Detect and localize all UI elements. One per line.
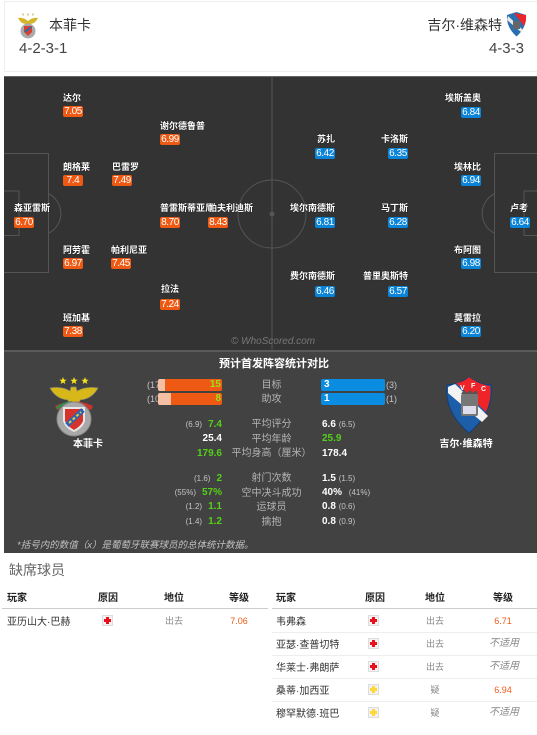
player: 巴雷罗 — [112, 162, 139, 186]
text: status out: 出去 — [165, 616, 183, 626]
player: 朗格莱: 朗格莱 — [63, 162, 90, 172]
player: 莫雷拉 — [454, 312, 481, 337]
panel: pitch with lineups — [4, 76, 537, 350]
icon: Gil Vicente crest large: V — [460, 385, 465, 392]
player: 班加基: 7.38 — [64, 326, 82, 337]
text: status out: 出去 — [426, 662, 444, 672]
player: 帕利尼亚: 7.45 — [112, 258, 130, 269]
player: 普雷斯蒂亚尼 — [160, 202, 214, 228]
chart: assists bar away: 1 — [324, 393, 330, 404]
player: 布阿图: 布阿图 — [454, 245, 481, 255]
player: 埃尔南德斯: 埃尔南德斯 — [290, 203, 335, 213]
player: 阿劳霍: 阿劳霍 — [63, 245, 90, 255]
heading: home team name: 本菲卡 — [49, 17, 91, 33]
player: 埃斯盖奥: 6.84 — [462, 107, 480, 118]
text: away assists league average: (1) — [386, 394, 397, 404]
icon: Gil Vicente crest large: C — [481, 386, 486, 393]
player: 普里奥斯特: 6.57 — [389, 286, 407, 297]
icon: Gil Vicente crest large — [446, 376, 492, 434]
text: rating: 7.06 — [230, 616, 248, 626]
stat: away dribbles: 0.8 (0.6) — [322, 501, 355, 512]
player: 谢尔德鲁普 — [160, 120, 205, 145]
text: label height: 平均身高（厘米） — [232, 448, 312, 459]
chart: assists bar home — [158, 393, 222, 405]
text: Benfica label: 本菲卡 — [73, 439, 103, 450]
stat: away rating: 6.6 (6.5) — [322, 419, 355, 430]
player: 莫雷拉: 6.20 — [462, 326, 480, 337]
chart: assists bar away — [321, 393, 385, 405]
icon: injury cross — [368, 638, 379, 649]
player: 马丁斯 — [381, 202, 408, 228]
player: 帕利尼亚 — [111, 245, 147, 269]
player: 帕利尼亚: 帕利尼亚 — [111, 245, 147, 255]
player: 埃林比: 埃林比 — [454, 162, 481, 172]
text: label age: 平均年龄 — [252, 434, 292, 445]
text: label tackles: 擒抱 — [262, 517, 282, 528]
player: 森亚雷斯: 森亚雷斯 — [14, 203, 50, 213]
player: 埃林比: 6.94 — [462, 175, 480, 186]
player: 朗格莱 — [63, 162, 90, 186]
icon: Gil Vicente crest small — [506, 12, 526, 36]
text: home formation: 4-2-3-1 — [19, 40, 67, 57]
player: 朗格莱: 7.4 — [67, 175, 79, 186]
stat: home aerial: (55%) 57% — [175, 487, 222, 498]
player: 费尔南德斯 — [290, 270, 335, 297]
player: 普雷斯蒂亚尼: 8.70 — [161, 217, 179, 228]
text: away goals league average: (3) — [386, 380, 397, 390]
player: 卡洛斯 — [381, 134, 408, 159]
player: 达尔 — [63, 92, 83, 117]
player: 班加基 — [63, 312, 90, 337]
text: Gil Vicente label: 吉尔·维森特 — [439, 439, 493, 450]
text: rating n/a: 不适用 — [489, 638, 519, 649]
stat: away tackles: 0.8 (0.9) — [322, 516, 355, 527]
text: label shots: 射门次数 — [252, 473, 292, 484]
icon: doubtful cross — [368, 707, 379, 718]
player: 卡洛斯: 6.35 — [389, 148, 407, 159]
player: 苏扎: 6.42 — [316, 148, 334, 159]
text: header player: 玩家 — [276, 593, 296, 604]
player: 卢考: 6.64 — [511, 217, 529, 228]
text: label aerial: 空中决斗成功 — [242, 488, 302, 499]
player: 阿劳霍 — [63, 245, 90, 269]
player: 普里奥斯特 — [363, 270, 408, 297]
icon: Benfica crest large — [50, 377, 98, 436]
player: 达尔: 7.05 — [64, 106, 82, 117]
stat: home dribbles: (1.2) 1.1 — [186, 501, 222, 512]
text: header status: 地位 — [164, 593, 184, 604]
player: 马丁斯: 6.28 — [389, 217, 407, 228]
row: 亚瑟·查普切特: 亚瑟·查普切特 — [276, 640, 339, 651]
table: away missing players — [272, 592, 537, 720]
player: 达尔: 达尔 — [63, 93, 81, 103]
row: 韦弗森: 韦弗森 — [276, 617, 306, 628]
player: 班加基: 班加基 — [63, 313, 90, 323]
panel: starting lineup stats comparison — [4, 350, 537, 553]
text: watermark: © WhoScored.com — [231, 336, 315, 347]
stat: away aerial: 40% (41%) — [322, 487, 370, 498]
text: label dribbles: 运球员 — [256, 502, 286, 513]
player: 普里奥斯特: 普里奥斯特 — [363, 271, 408, 281]
player: 拉法: 拉法 — [161, 284, 179, 294]
chart: goals bar away: 3 — [324, 379, 330, 390]
text: status out: 出去 — [426, 616, 444, 626]
player: 普雷斯蒂亚尼: 普雷斯蒂亚尼 — [160, 203, 214, 213]
player: 帕夫利迪斯: 帕夫利迪斯 — [208, 203, 253, 213]
icon: injury cross — [102, 615, 113, 626]
text: home assists league average: (10) — [147, 394, 163, 404]
text: status doubtful: 疑 — [430, 685, 440, 695]
player: 拉法 — [160, 284, 180, 310]
chart: goals bar home: 15 — [210, 379, 221, 390]
player: 谢尔德鲁普: 谢尔德鲁普 — [160, 121, 205, 131]
player: 拉法: 7.24 — [161, 299, 179, 310]
player: 卢考: 卢考 — [510, 203, 528, 213]
icon: Gil Vicente crest large: F — [471, 383, 476, 390]
chart: assists bar home: 8 — [215, 393, 221, 404]
player: 谢尔德鲁普: 6.99 — [161, 134, 179, 145]
player: 卡洛斯: 卡洛斯 — [381, 134, 408, 144]
table: home missing players — [2, 592, 268, 628]
stat: away shots: 1.5 (1.5) — [322, 473, 355, 484]
stat: away age: 25.9 — [322, 433, 341, 444]
player: 巴雷罗: 7.49 — [113, 175, 131, 186]
text: header rating: 等级 — [229, 593, 249, 604]
text: rating n/a: 不适用 — [489, 661, 519, 672]
chart: pitch markings — [4, 77, 537, 350]
text: rating: 6.71 — [494, 616, 512, 626]
player: 马丁斯: 马丁斯 — [381, 203, 408, 213]
icon: doubtful cross — [368, 684, 379, 695]
text: status out: 出去 — [426, 639, 444, 649]
stat: home tackles: (1.4) 1.2 — [186, 516, 222, 527]
text: header status: 地位 — [425, 593, 445, 604]
text: header reason: 原因 — [98, 593, 118, 604]
text: header player: 玩家 — [7, 593, 27, 604]
player: 埃尔南德斯: 6.81 — [316, 217, 334, 228]
panel: match header — [4, 1, 537, 72]
stat: home rating: (6.9) 7.4 — [186, 419, 222, 430]
player: 森亚雷斯 — [14, 202, 50, 228]
text: rating: 6.94 — [494, 685, 512, 695]
player: 苏扎 — [315, 134, 335, 159]
player: 埃斯盖奥: 埃斯盖奥 — [445, 93, 481, 103]
heading: missing players: 缺席球员 — [9, 562, 65, 578]
text: label assists: 助攻 — [262, 394, 282, 405]
player: 帕夫利迪斯: 8.43 — [209, 217, 227, 228]
row: 桑蒂·加西亚: 桑蒂·加西亚 — [276, 686, 329, 697]
player: 苏扎: 苏扎 — [317, 134, 335, 144]
player: 费尔南德斯: 6.46 — [316, 286, 334, 297]
icon: injury cross — [368, 615, 379, 626]
player: 莫雷拉: 莫雷拉 — [454, 313, 481, 323]
player: 布阿图: 6.98 — [462, 258, 480, 269]
player: 巴雷罗: 巴雷罗 — [112, 162, 139, 172]
chart: goals bar away — [321, 379, 385, 391]
player: 帕夫利迪斯 — [208, 202, 253, 228]
player: 卢考 — [510, 202, 530, 228]
text: rating n/a: 不适用 — [489, 707, 519, 718]
text: label goals: 目标 — [262, 380, 282, 391]
row: 穆罕默德·班巴: 穆罕默德·班巴 — [276, 709, 339, 720]
player: 布阿图 — [454, 245, 481, 269]
row: 华莱士·弗朗萨: 华莱士·弗朗萨 — [276, 663, 339, 674]
chart: goals bar home — [158, 379, 222, 391]
text: away formation: 4-3-3 — [489, 40, 524, 57]
text: status doubtful: 疑 — [430, 708, 440, 718]
player: 森亚雷斯: 6.70 — [15, 217, 33, 228]
text: label rating: 平均评分 — [252, 419, 292, 430]
heading: away team name: 吉尔·维森特 — [427, 17, 502, 33]
icon: injury cross — [368, 661, 379, 672]
icon: Benfica crest small — [18, 13, 38, 38]
stat: home age: 25.4 — [203, 433, 222, 444]
player: 埃斯盖奥 — [445, 92, 481, 118]
stat: home height: 179.6 — [197, 448, 222, 459]
row: 亚历山大·巴赫: 亚历山大·巴赫 — [7, 617, 70, 628]
text: header reason: 原因 — [365, 593, 385, 604]
stat: home shots: (1.6) 2 — [194, 473, 222, 484]
heading: stats title: 预计首发阵容统计对比 — [219, 358, 329, 370]
stat: away height: 178.4 — [322, 448, 347, 459]
text: home goals league average: (17) — [147, 380, 163, 390]
text: header rating: 等级 — [493, 593, 513, 604]
text: footnote: *括号内的数值（x）是葡萄牙联赛球员的总体统计数据。 — [17, 540, 253, 551]
player: 阿劳霍: 6.97 — [64, 258, 82, 269]
player: 费尔南德斯: 费尔南德斯 — [290, 271, 335, 281]
player: 埃尔南德斯 — [290, 202, 335, 228]
player: 埃林比 — [454, 162, 481, 186]
